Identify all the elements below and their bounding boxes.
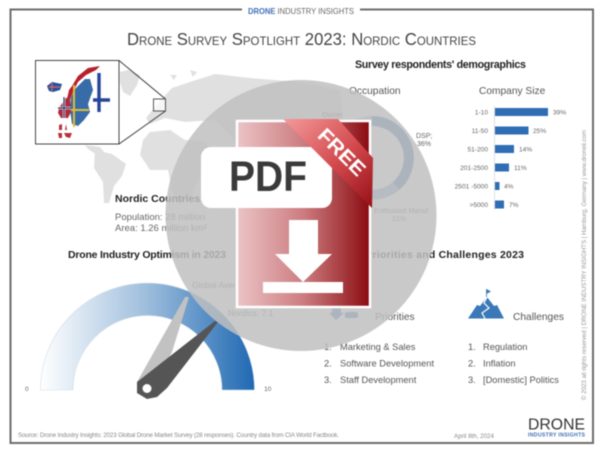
download arrow bbox=[263, 220, 343, 293]
priorities list: Software Development bbox=[340, 358, 434, 368]
donut labels: Owner bbox=[322, 112, 343, 119]
gauge scale labels: 0 bbox=[25, 386, 29, 393]
logo: INDUSTRY INSIGHTS bbox=[528, 432, 586, 438]
priorities list: 2. bbox=[324, 358, 332, 368]
gauge labels bbox=[192, 280, 274, 318]
gauge scale labels: 10 bbox=[264, 386, 272, 393]
gauge labels: Nordics: 7.1 bbox=[228, 308, 274, 318]
free ribbon: FREE bbox=[313, 124, 370, 181]
icon: mountain with flag bbox=[468, 289, 504, 318]
priorities heading: Priorities bbox=[375, 312, 415, 323]
pdf download badge bbox=[201, 119, 373, 307]
header brand: DRONE INDUSTRY INSIGHTS bbox=[248, 6, 354, 16]
donut labels: 36% bbox=[417, 141, 431, 148]
gauge scale labels bbox=[25, 386, 272, 393]
source note: Source: Drone Industry Insights: 2023 Global Drone Market Survey (28 responses). Country data from CIA World Factbook. bbox=[18, 432, 339, 439]
donut labels: DSP; bbox=[416, 133, 432, 140]
pdf document page bbox=[237, 121, 370, 307]
company size bar chart: 14% bbox=[519, 146, 532, 154]
priorities list: Staff Development bbox=[340, 375, 417, 385]
company size bar chart: >5000 bbox=[469, 202, 488, 209]
priorities list bbox=[324, 342, 434, 385]
demographics heading: Survey respondents' demographics bbox=[355, 59, 526, 71]
challenges list: [Domestic] Politics bbox=[483, 375, 559, 385]
company size bar chart: 11% bbox=[514, 165, 527, 172]
priorities list: Marketing & Sales bbox=[340, 342, 416, 352]
gauge labels: Global Average: 6.4 bbox=[192, 280, 267, 290]
free ribbon bbox=[283, 119, 373, 208]
nordic countries text: Nordic Countries: bbox=[115, 193, 204, 205]
company size bar chart: 4% bbox=[504, 184, 514, 190]
date: April 8th, 2024 bbox=[454, 433, 494, 440]
challenges list: 3. bbox=[468, 375, 476, 385]
world map bbox=[85, 70, 345, 205]
occupation donut chart bbox=[336, 121, 409, 195]
challenges list: 2. bbox=[468, 358, 476, 368]
zoom marker square bbox=[154, 99, 166, 111]
company size bar chart: 7% bbox=[509, 202, 519, 209]
nordic countries text: Area: 1.26 million km² bbox=[115, 223, 207, 234]
optimism gauge bbox=[40, 283, 254, 390]
optimism heading: Drone Industry Optimism in 2023 bbox=[68, 249, 226, 261]
company size bar chart: 201-2500 bbox=[460, 165, 488, 172]
zoom callout lines bbox=[119, 60, 166, 144]
nordic countries text bbox=[115, 193, 207, 234]
challenges list: Inflation bbox=[483, 358, 516, 368]
overlay circle bbox=[166, 80, 436, 351]
challenges heading: Challenges bbox=[513, 312, 564, 323]
priorities and challenges heading: Top Priorities and Challenges 2023 bbox=[343, 249, 524, 261]
donut labels bbox=[322, 112, 432, 223]
icon: priorities bbox=[329, 308, 358, 320]
company size bar chart: 39% bbox=[553, 110, 566, 116]
company size bar chart: 51-200 bbox=[467, 146, 488, 154]
nordics needle bbox=[137, 321, 218, 399]
challenges list bbox=[468, 342, 559, 385]
company size bar chart bbox=[455, 106, 566, 210]
occupation heading: Occupation bbox=[349, 86, 401, 97]
company size bar chart: 1-10 bbox=[475, 110, 488, 116]
pdf label: PDF bbox=[229, 154, 307, 201]
global average needle bbox=[137, 297, 189, 392]
title: Drone Survey Spotlight 2023: Nordic Countries bbox=[127, 29, 476, 49]
company size bar chart: 2501 -5000 bbox=[455, 184, 488, 190]
logo: DRONE bbox=[528, 416, 585, 434]
challenges list: Regulation bbox=[483, 342, 527, 352]
challenges list: 1. bbox=[468, 342, 476, 352]
donut labels: Enthusiast Manuf. bbox=[374, 208, 430, 215]
donut labels: 21% bbox=[392, 216, 406, 223]
company size bar chart: 25% bbox=[533, 128, 546, 135]
company size bar chart: 11-50 bbox=[472, 128, 488, 135]
priorities list: 1. bbox=[324, 342, 332, 352]
side copyright: © 2023 all rights reserved | DRONE INDUSTRY INSIGHTS | Hamburg, Germany | www.droneii.com bbox=[581, 130, 588, 400]
company size heading: Company Size bbox=[479, 86, 546, 97]
nordic countries text: Population: 28 million bbox=[115, 212, 205, 223]
pdf label bbox=[201, 147, 332, 208]
priorities list: 3. bbox=[324, 375, 332, 385]
inset map: nordic flags bbox=[36, 60, 119, 144]
